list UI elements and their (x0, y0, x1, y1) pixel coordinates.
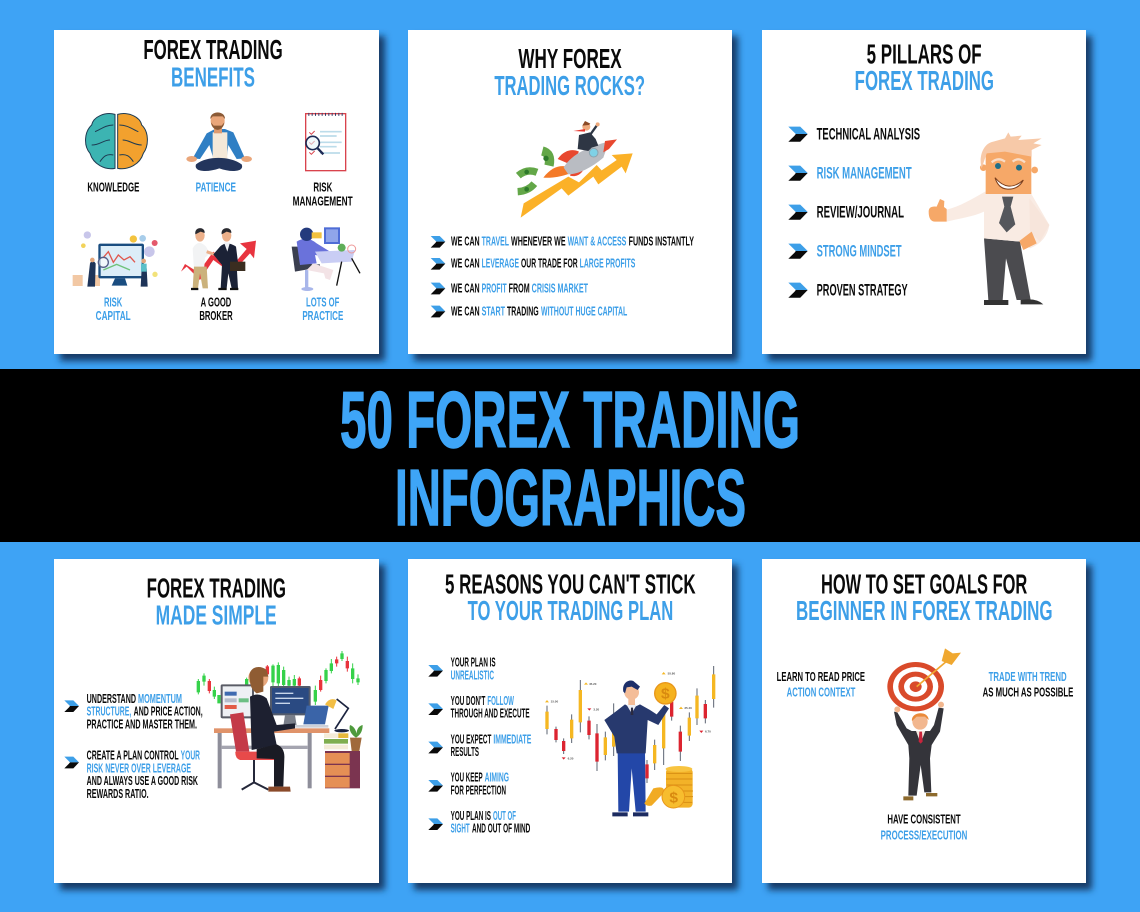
bullet: start (431, 303, 627, 318)
goal: read price action: LEARN TO READ PRICE (777, 669, 865, 684)
bullet: travel (431, 234, 694, 249)
panel: forex trading benefits (54, 30, 385, 361)
panel: five reasons (408, 559, 738, 890)
illustration: businessman with coins and candlesticks: 45.20 (589, 682, 597, 686)
reason: immediate results (428, 731, 531, 759)
heading: how to set goals (796, 568, 1053, 626)
goal: consistent process: PROCESS/EXECUTION (881, 827, 967, 842)
label: a good broker: BROKER (199, 309, 233, 323)
label: risk capital: RISK (104, 296, 123, 310)
illustration: businessman thumbs up (929, 132, 1049, 305)
bullet: profit (431, 281, 588, 296)
reason: immediate results: IMMEDIATE (493, 731, 531, 746)
heading: 5 pillars of forex trading (855, 38, 994, 96)
heading: why forex trading rocks (494, 43, 645, 101)
reason: out of sight: YOU PLAN IS (451, 808, 491, 823)
bullet: profit: FROM (509, 281, 530, 296)
icon: risk notepad (306, 114, 346, 171)
bullet: understand momentum: AND PRICE ACTION, (134, 704, 203, 719)
illustration: businessman with coins and candlesticks (545, 666, 714, 816)
reason: out of sight: OUT OF (493, 808, 516, 823)
goal: trade with trend (983, 669, 1073, 700)
bullet: leverage (431, 256, 635, 271)
heading: forex trading made simple (147, 572, 286, 630)
bullet: travel: WANT & ACCESS (568, 234, 626, 249)
bullet: start: START (482, 303, 505, 318)
heading: five reasons you can't stick: 5 REASONS YOU CAN'T STICK (445, 568, 696, 599)
heading: why forex trading rocks: WHY FOREX (518, 43, 622, 74)
panel: why forex trading rocks (408, 30, 738, 361)
bullet: understand momentum: UNDERSTAND (87, 691, 136, 706)
panel: five reasons: YOUR PLAN IS (451, 655, 496, 670)
icon: rocket on rising arrow (518, 121, 633, 218)
label: patience: PATIENCE (196, 181, 236, 195)
reason: immediate results: YOU EXPECT (451, 731, 491, 746)
icon: brain (86, 114, 147, 169)
reason: unrealistic plan (428, 655, 496, 682)
illustration: man holding target (887, 648, 961, 800)
bullet: understand momentum: MOMENTUM (138, 691, 182, 706)
pillar: technical analysis (788, 125, 920, 143)
illustration: businessman with coins and candlesticks: $ (669, 790, 678, 806)
heading: forex trading benefits (143, 34, 283, 92)
reason: no follow through: FOLLOW (487, 693, 514, 708)
goal: trade with trend: TRADE WITH TREND (989, 669, 1067, 684)
heading: five reasons you can't stick (445, 568, 696, 626)
bullet: travel: TRAVEL (482, 234, 509, 249)
bullet: profit: WE CAN (451, 281, 480, 296)
label: risk capital (96, 296, 131, 323)
reason: aiming for perfection (428, 770, 509, 797)
heading: five reasons you can't stick: TO YOUR TRADING PLAN (468, 595, 673, 626)
panel: five reasons: AND OUT OF MIND (472, 821, 531, 836)
pillar: risk management (788, 164, 912, 182)
reason: aiming for perfection: AIMING (485, 770, 509, 785)
goal: consistent process (881, 811, 967, 842)
bullet: leverage: WE CAN (451, 256, 480, 271)
illustration: businessman with coins and candlesticks: 3.20 (593, 707, 599, 711)
bullet: create a plan: YOUR (181, 748, 200, 763)
illustration: businessman with coins and candlesticks: $ (661, 686, 670, 702)
icon: handshake with arrow (181, 228, 256, 289)
bullet: start: TRADING (507, 303, 539, 318)
label: a good broker (199, 296, 233, 323)
illustration: businessman with coins and candlesticks: 6.70 (705, 730, 711, 734)
reason: aiming for perfection: YOU KEEP (451, 770, 483, 785)
goal: trade with trend: AS MUCH AS POSSIBLE (983, 685, 1073, 700)
bullet: profit: PROFIT (482, 281, 507, 296)
illustration: trader at desk with candlesticks (198, 651, 363, 792)
bullet: create a plan: RISK NEVER OVER LEVERAGE (87, 760, 191, 775)
bullet: create a plan (64, 748, 200, 801)
bullet: start: WE CAN (451, 303, 480, 318)
bullet: leverage: OUR TRADE FOR (521, 256, 578, 271)
panel: five reasons: FOR PERFECTION (451, 782, 506, 797)
banner: main title: 50 FOREX TRADING (340, 375, 800, 464)
label: risk capital: CAPITAL (96, 309, 131, 323)
panel: five pillars (762, 30, 1092, 361)
banner: main title (0, 369, 1140, 542)
label: risk management (293, 181, 353, 208)
bullet: start: WITHOUT HUGE CAPITAL (541, 303, 627, 318)
illustration: businessman with coins and candlesticks: 6.20 (568, 756, 574, 760)
label: lots of practice (302, 296, 343, 323)
reason: out of sight: SIGHT (451, 821, 470, 836)
pillar: review journal (788, 203, 904, 221)
pillar: proven strategy (788, 281, 908, 299)
reason: immediate results: RESULTS (451, 744, 479, 759)
panel: forex trading made simple (54, 559, 385, 890)
heading: forex trading made simple: MADE SIMPLE (156, 599, 277, 630)
label: risk management: RISK (313, 181, 333, 195)
heading: why forex trading rocks: TRADING ROCKS? (494, 70, 645, 101)
label: lots of practice: PRACTICE (302, 309, 343, 323)
banner: main title: INFOGRAPHICS (395, 453, 746, 542)
bullet: profit: CRISIS MARKET (532, 281, 588, 296)
bullet: understand momentum (64, 691, 203, 731)
bullet: leverage: LARGE PROFITS (580, 256, 635, 271)
pillar: strong mindset (788, 242, 902, 260)
label: risk management: MANAGEMENT (293, 194, 353, 208)
bullet: create a plan: REWARDS RATIO. (87, 786, 149, 801)
bullet: travel: WHENEVER WE (511, 234, 566, 249)
panel: how to set goals (762, 559, 1092, 890)
reason: no follow through: YOU DON'T (451, 693, 485, 708)
panel: five reasons: THROUGH AND EXECUTE (451, 706, 530, 721)
label: a good broker: A GOOD (201, 296, 231, 310)
bullet: create a plan: CREATE A PLAN CONTROL (87, 748, 179, 763)
bullet: travel: WE CAN (451, 234, 480, 249)
icon: risk capital monitor (73, 231, 158, 287)
pillar: strong mindset: STRONG MINDSET (817, 242, 902, 260)
goal: read price action: ACTION CONTEXT (787, 685, 855, 700)
pillar: review journal: REVIEW/JOURNAL (817, 203, 904, 221)
illustration: businessman with coins and candlesticks: 15.00 (551, 699, 558, 703)
pillar: technical analysis: TECHNICAL ANALYSIS (817, 125, 920, 143)
icon: meditating man (186, 112, 252, 171)
goal: consistent process: HAVE CONSISTENT (887, 811, 961, 826)
bullet: create a plan: AND ALWAYS USE A GOOD RISK (87, 773, 198, 788)
reason: out of sight (428, 808, 531, 836)
bullet: travel: FUNDS INSTANTLY (629, 234, 694, 249)
heading: forex trading made simple: FOREX TRADING (147, 572, 286, 603)
pillar: proven strategy: PROVEN STRATEGY (817, 281, 908, 299)
reason: no follow through (428, 693, 530, 721)
bullet: understand momentum: PRACTICE AND MASTER THEM. (87, 716, 197, 731)
heading: 5 pillars of forex trading: 5 PILLARS OF (867, 38, 982, 69)
goal: read price action (777, 669, 865, 700)
icon: trader at desk (292, 227, 360, 291)
pillar: risk management: RISK MANAGEMENT (817, 164, 912, 182)
heading: 5 pillars of forex trading: FOREX TRADING (855, 65, 994, 96)
bullet: understand momentum: STRUCTURE, (87, 704, 131, 719)
illustration: businessman with coins and candlesticks: 35.40 (684, 706, 692, 710)
heading: forex trading benefits: BENEFITS (171, 61, 255, 92)
illustration: businessman with coins and candlesticks: 55.80 (668, 672, 675, 676)
heading: forex trading benefits: FOREX TRADING (143, 34, 283, 65)
label: knowledge: KNOWLEDGE (87, 181, 139, 195)
label: lots of practice: LOTS OF (306, 296, 339, 310)
reason: unrealistic plan: UNREALISTIC (451, 667, 494, 682)
bullet: leverage: LEVERAGE (482, 256, 519, 271)
